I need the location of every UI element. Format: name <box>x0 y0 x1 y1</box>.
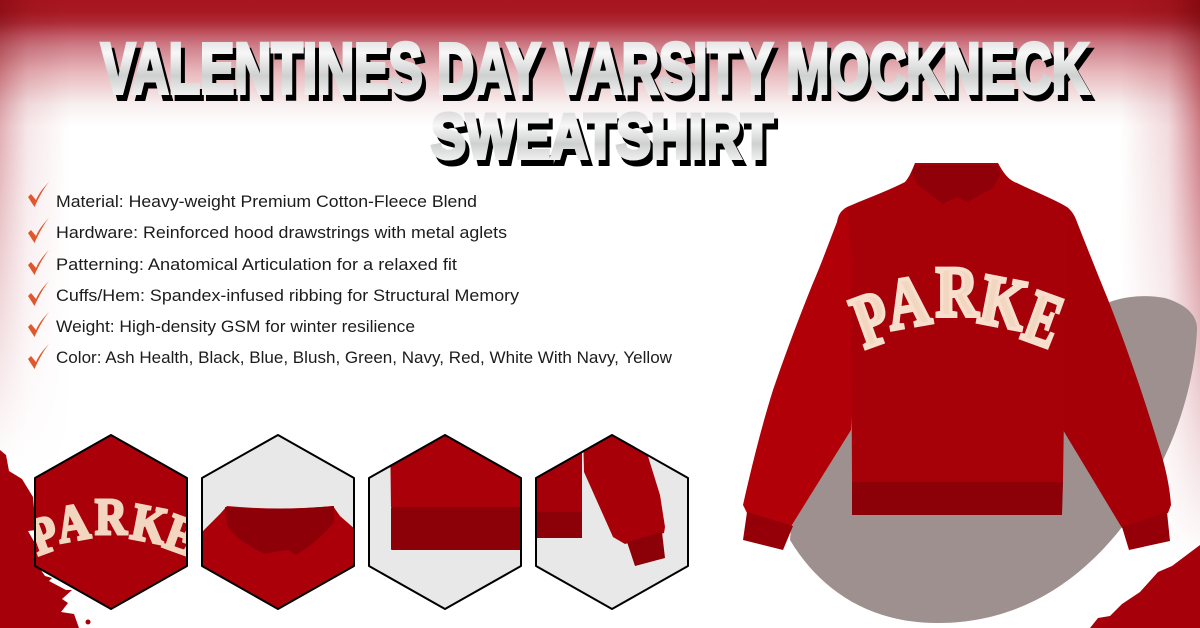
list item: color <box>28 344 672 369</box>
PARKE lettering: P <box>842 275 902 365</box>
hexagon: PARKE lettering detail: P <box>22 504 66 567</box>
feature list <box>28 182 672 369</box>
title line 2: SWEATSHIRT <box>431 102 773 172</box>
hexagon: hem detail <box>365 430 525 615</box>
list item: material: Material: Heavy-weight Premium Cotton-Fleece Blend <box>56 193 477 211</box>
right cuff <box>1122 512 1170 550</box>
PARKE lettering: K <box>973 259 1034 346</box>
hexagon: collar detail <box>200 430 360 615</box>
list item: cuffs and hem <box>28 281 520 306</box>
left cuff <box>743 512 793 550</box>
list item: patterning: Patterning: Anatomical Articulation for a relaxed fit <box>56 256 457 274</box>
sweatshirt <box>743 163 1171 550</box>
list item: material <box>28 182 477 211</box>
title <box>101 30 1093 178</box>
hexagon: PARKE lettering detail: A <box>52 493 94 554</box>
hexagon: PARKE lettering detail: K <box>127 493 172 556</box>
red paint splash: bottom left <box>0 450 90 628</box>
PARKE lettering: R <box>936 253 980 332</box>
hexagon: PARKE lettering detail: R <box>95 489 128 546</box>
right sleeve <box>1050 207 1171 528</box>
PARKE lettering: A <box>880 260 936 346</box>
red paint splash: bottom right <box>1090 545 1200 628</box>
hexagon: PARKE lettering detail: E <box>158 504 204 567</box>
list item: cuffs and hem: Cuffs/Hem: Spandex-infused ribbing for Structural Memory <box>56 287 520 305</box>
list item: hardware <box>28 218 507 243</box>
list item: hardware: Hardware: Reinforced hood drawstrings with metal aglets <box>56 224 507 242</box>
hem rib <box>852 482 1063 515</box>
hexagon: sleeve cuff detail <box>535 434 689 610</box>
title line 2: SWEATSHIRT <box>435 108 777 178</box>
list item: weight <box>28 312 415 337</box>
left sleeve <box>743 207 862 528</box>
list item: patterning <box>28 250 457 275</box>
list item: color: Color: Ash Health, Black, Blue, Blush, Green, Navy, Red, White With Navy, Yellow <box>56 349 672 367</box>
PARKE lettering: E <box>1014 274 1073 364</box>
PARKE lettering <box>842 253 1073 365</box>
hexagon: PARKE lettering detail <box>34 434 188 610</box>
grey blob behind sweatshirt <box>790 296 1197 623</box>
torso <box>847 163 1067 482</box>
list item: weight: Weight: High-density GSM for winter resilience <box>56 318 415 336</box>
inner neck <box>912 165 1000 204</box>
